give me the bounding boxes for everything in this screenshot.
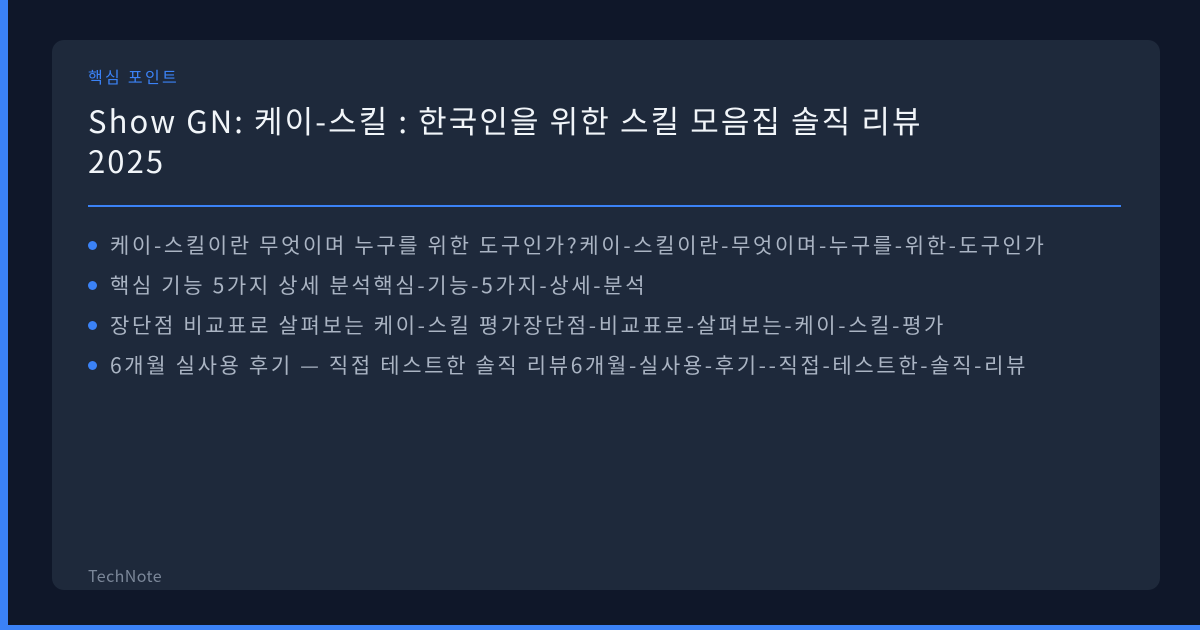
bullet 1: 케이-스킬이란 무엇이며 누구를 위한 도구인가?케이-스킬이란-무엇이며-누구를-위한-도구인가	[110, 230, 1046, 260]
bullet 2: 핵심 기능 5가지 상세 분석핵심-기능-5가지-상세-분석	[110, 270, 647, 300]
bullet 4: 6개월 실사용 후기 — 직접 테스트한 솔직 리뷰6개월-실사용-후기--직접-테스트한-솔직-리뷰	[110, 350, 1028, 380]
footer brand: TechNote	[88, 563, 162, 587]
bullet list	[88, 230, 1046, 380]
kicker label: 핵심 포인트	[88, 64, 179, 88]
title: Show GN: 케이-스킬 : 한국인을 위한 스킬 모음집 솔직 리뷰 2025	[88, 97, 923, 182]
bullet 3: 장단점 비교표로 살펴보는 케이-스킬 평가장단점-비교표로-살펴보는-케이-스킬-평가	[110, 310, 946, 340]
